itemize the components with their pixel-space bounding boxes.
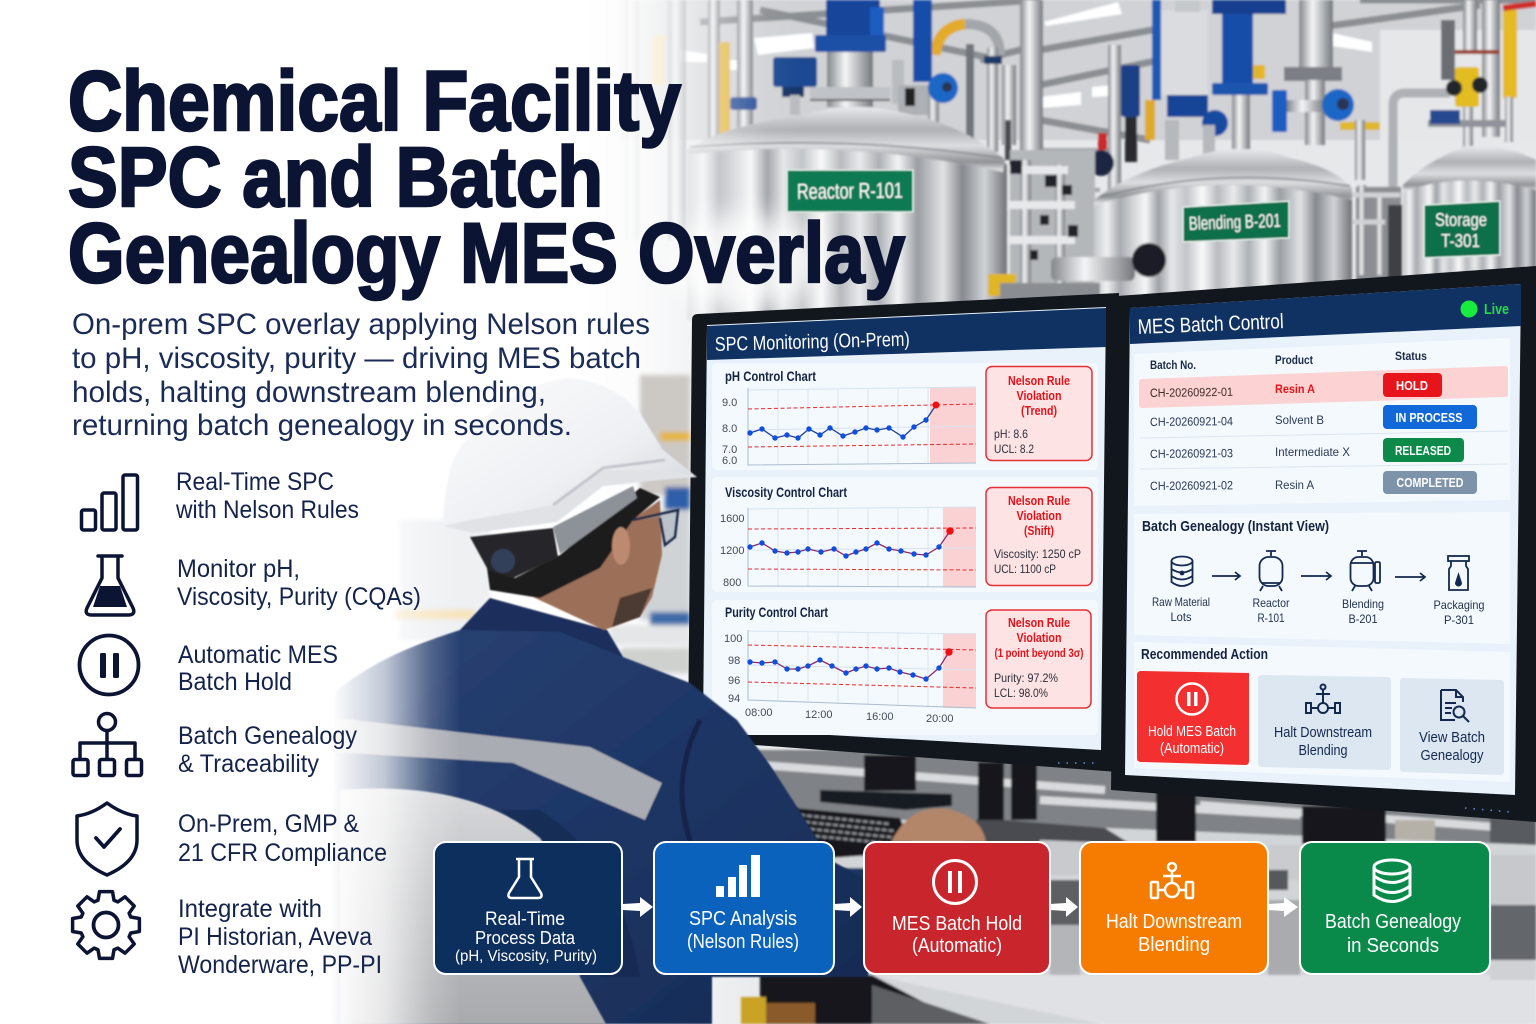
process flow: [434, 842, 1490, 974]
tanks: [687, 107, 1007, 320]
viscosity control chart panel: 1600: [720, 513, 744, 525]
status LEDs: [1058, 762, 1096, 764]
icon: pause: [80, 636, 138, 694]
equipment label: Reactor R-101: [787, 170, 913, 212]
status badge: in process: IN PROCESS: [1396, 410, 1463, 425]
purity control chart panel: [712, 600, 1098, 735]
status badge: in process: [1383, 405, 1477, 429]
screen background: [1125, 284, 1521, 795]
title: Genealogy MES Overlay: [68, 206, 905, 300]
batch status table: Resin A: [1275, 382, 1315, 396]
chair back: [340, 789, 606, 1024]
status badge: completed: [1383, 471, 1477, 494]
step 1: real-time process data: Real-Time: [485, 909, 565, 930]
purity control chart panel: 20:00: [926, 713, 954, 725]
desk and hardware below the monitors: [741, 750, 1536, 1024]
icon: bars: [82, 475, 138, 530]
subtitle: returning batch genealogy in seconds.: [72, 409, 572, 442]
purity control chart panel: 08:00: [745, 707, 773, 719]
pH control chart panel: 7.0: [722, 444, 737, 456]
lower dark area: [834, 868, 868, 978]
step 3: MES batch hold: (Automatic): [912, 935, 1002, 957]
purity violation alert: Nelson Rule: [1008, 615, 1070, 630]
recommended action panel: [1134, 642, 1510, 782]
viscosity control chart panel: [712, 477, 1098, 592]
subtitle: On-prem SPC overlay applying Nelson rules: [72, 308, 650, 341]
action button: halt downstream blending: [1258, 675, 1391, 770]
arrow: [623, 897, 653, 917]
purity control chart panel: 16:00: [866, 711, 894, 723]
status LEDs: [1465, 808, 1510, 812]
feature: monitor CQAs: Viscosity, Purity (CQAs): [177, 583, 421, 611]
equipment label: Blending B-201: Blending B-201: [1188, 211, 1281, 235]
icon: blending vessel: [1350, 551, 1380, 591]
left-of-tank cluster: [1010, 150, 1095, 300]
feature: automatic hold: [80, 636, 338, 696]
pH control chart panel: 9.0: [722, 397, 737, 409]
feature: integration: Wonderware, PP-PI: [178, 951, 382, 979]
action button: view batch genealogy: Genealogy: [1420, 747, 1484, 764]
purity control chart panel: 94: [728, 693, 740, 705]
equipment label: Reactor R-101: Reactor R-101: [797, 178, 903, 204]
viscosity violation alert: (Shift): [1024, 523, 1054, 538]
icon: raw material drum: [1172, 556, 1192, 586]
feature: real-time SPC: Real-Time SPC: [176, 468, 334, 496]
batch status table: CH-20260922-01: [1150, 385, 1233, 400]
pH control chart panel: 6.0: [722, 455, 737, 467]
purity control chart panel: 100: [724, 633, 742, 645]
arrow: [1301, 572, 1331, 580]
purity control chart panel: 12:00: [805, 709, 833, 721]
equipment label: Storage T-301: T-301: [1441, 231, 1480, 251]
icon: shield: [77, 803, 137, 875]
suspension strap: [470, 528, 558, 578]
action button: hold MES batch: Hold MES Batch: [1148, 723, 1236, 740]
batch status table: CH-20260921-02: [1150, 478, 1233, 493]
viscosity control chart panel: Viscosity Control Chart: [725, 484, 847, 500]
icon: reactor: [1260, 551, 1282, 591]
screen title: MES Batch Control: [1137, 310, 1284, 339]
step 1: real-time process data: Process Data: [475, 928, 576, 948]
batch genealogy panel: Reactor: [1252, 596, 1290, 610]
feature list: [73, 468, 421, 979]
batch status table: Status: [1395, 349, 1427, 363]
feature: integration: [73, 892, 382, 979]
blurred background behind worker: [395, 375, 690, 673]
step 4: halt downstream blending: [1080, 842, 1268, 974]
batch genealogy panel: [1134, 512, 1510, 644]
header bar: [707, 308, 1106, 360]
batch genealogy panel: Blending: [1342, 597, 1384, 611]
batch status table: Intermediate X: [1275, 445, 1350, 459]
purity violation alert: Violation: [1016, 630, 1062, 645]
status badge: released: RELEASED: [1395, 443, 1451, 458]
action button: halt downstream blending: Halt Downstream: [1274, 724, 1372, 741]
desk posts: [978, 762, 1004, 820]
hand: [891, 808, 986, 842]
icon: hierarchy: [73, 714, 142, 776]
action button: hold MES batch: (Automatic): [1160, 740, 1224, 757]
safety glasses: [633, 510, 678, 545]
step 1: real-time process data: [434, 842, 622, 974]
feature: automatic hold: Batch Hold: [178, 668, 292, 696]
recommended action panel: Recommended Action: [1141, 646, 1268, 663]
step 2: SPC analysis: [654, 842, 834, 974]
arrow: [1268, 897, 1298, 917]
step 5: batch genealogy in seconds: [1300, 842, 1490, 974]
middle stack: [1152, 0, 1161, 100]
viscosity violation alert: [986, 488, 1092, 586]
pH violation alert: (Trend): [1021, 403, 1057, 418]
batch status table: Batch No.: [1150, 358, 1196, 372]
batch status table: Resin A: [1275, 478, 1314, 492]
live indicator: [1460, 300, 1509, 318]
status badge: hold: [1383, 373, 1442, 397]
pH violation alert: Nelson Rule: [1008, 373, 1070, 388]
batch status table: [1134, 338, 1510, 506]
pH control chart panel: pH Control Chart: [725, 368, 816, 384]
step 5: batch genealogy in seconds: in Seconds: [1347, 935, 1439, 957]
viscosity violation alert: Nelson Rule: [1008, 493, 1070, 508]
title: SPC and Batch: [68, 130, 603, 224]
subtitle: [72, 308, 650, 442]
batch genealogy panel: Lots: [1170, 610, 1192, 624]
purity control chart panel: 98: [728, 655, 740, 667]
screen title: SPC Monitoring (On-Prem): [715, 329, 910, 356]
pH control chart panel: [712, 363, 1098, 470]
action button: halt downstream blending: Blending: [1298, 742, 1348, 759]
subtitle: to pH, viscosity, purity — driving MES batch: [72, 342, 641, 375]
batch genealogy panel: Packaging: [1434, 598, 1484, 612]
left monitor: SPC Monitoring: [688, 293, 1119, 772]
ear: [612, 527, 630, 565]
feature: genealogy: & Traceability: [178, 750, 319, 778]
soft white glow near title end: [670, 214, 820, 310]
shirt: [330, 600, 868, 1024]
fade: lower-left white wash over worker: [0, 500, 1536, 1024]
step 3: MES batch hold: [864, 842, 1050, 974]
batch genealogy panel: Batch Genealogy (Instant View): [1142, 518, 1329, 535]
pH violation alert: [986, 366, 1092, 460]
step 4: halt downstream blending: Halt Downstream: [1106, 911, 1242, 933]
step 5: batch genealogy in seconds: Batch Genealogy: [1325, 911, 1461, 933]
right monitor: MES Batch Control: [1111, 266, 1536, 822]
pH violation alert: UCL: 8.2: [994, 442, 1034, 456]
step 3: MES batch hold: MES Batch Hold: [892, 913, 1022, 935]
feature: integration: PI Historian, Aveva: [178, 923, 372, 951]
feature: compliance: [77, 803, 387, 875]
icon: packaging: [1448, 556, 1469, 590]
status badge: released: [1383, 438, 1464, 462]
feature: compliance: On-Prem, GMP &: [178, 810, 359, 838]
viscosity control chart panel: 800: [723, 577, 741, 589]
title: [68, 54, 905, 300]
action button: view batch genealogy: [1400, 678, 1504, 775]
collar: [460, 598, 623, 657]
subtitle: holds, halting downstream blending,: [72, 376, 546, 409]
action button: hold MES batch: [1137, 671, 1249, 765]
feature: genealogy: [73, 714, 357, 778]
header bar: [1130, 284, 1521, 344]
vertical columns: [625, 0, 639, 240]
batch genealogy panel: B-201: [1348, 612, 1378, 626]
worker in hard hat: [330, 378, 868, 1024]
step 2: SPC analysis: (Nelson Rules): [687, 931, 799, 953]
feature: monitor CQAs: [86, 555, 421, 615]
pH control chart panel: 8.0: [722, 423, 737, 435]
equipment label: Storage T-301: [1424, 201, 1500, 258]
viscosity violation alert: Viscosity: 1250 cP: [994, 547, 1081, 561]
pH violation alert: pH: 8.6: [994, 427, 1028, 441]
arrow: [1212, 572, 1240, 580]
live indicator: Live: [1484, 301, 1509, 318]
feature: automatic hold: Automatic MES: [178, 641, 338, 669]
icon: flask: [86, 556, 134, 615]
purity violation alert: LCL: 98.0%: [994, 686, 1048, 700]
batch genealogy panel: Raw Material: [1152, 595, 1210, 609]
arrow: [834, 897, 862, 917]
beard: [612, 588, 652, 627]
batch status table: CH-20260921-03: [1150, 446, 1233, 461]
icon: gear: [73, 892, 139, 958]
feature: real-time SPC: [82, 468, 359, 530]
viscosity violation alert: UCL: 1100 cP: [994, 562, 1056, 576]
arrow: [1050, 897, 1078, 917]
screen background: [703, 307, 1106, 750]
step 1: real-time process data: (pH, Viscosity, Purity): [455, 948, 597, 965]
reactor stack: [935, 24, 965, 55]
pipes between tanks: [1356, 187, 1401, 287]
action button: view batch genealogy: View Batch: [1419, 729, 1485, 746]
stand and keyboard: [864, 755, 916, 791]
equipment label: Blending B-201: [1183, 201, 1289, 242]
step 2: SPC analysis: SPC Analysis: [689, 908, 797, 930]
feature: genealogy: Batch Genealogy: [178, 722, 357, 750]
batch genealogy panel: R-101: [1258, 611, 1285, 625]
hard hat: [443, 378, 697, 533]
viscosity violation alert: Violation: [1016, 508, 1062, 523]
status badge: hold: HOLD: [1396, 378, 1428, 393]
feature: compliance: 21 CFR Compliance: [178, 839, 387, 867]
purity violation alert: Purity: 97.2%: [994, 671, 1058, 685]
purity control chart panel: Purity Control Chart: [725, 604, 828, 620]
ceiling: [620, 0, 1536, 140]
feature: real-time SPC: with Nelson Rules: [175, 496, 359, 524]
purity violation alert: [986, 610, 1091, 708]
purity control chart panel: 96: [728, 675, 740, 687]
feature: integration: Integrate with: [178, 895, 322, 923]
batch status table: Solvent B: [1275, 413, 1324, 427]
ceiling lights: [680, 2, 1372, 108]
purity violation alert: (1 point beyond 3σ): [994, 646, 1084, 660]
step 4: halt downstream blending: Blending: [1138, 934, 1210, 956]
pH violation alert: Violation: [1016, 388, 1062, 403]
status badge: completed: COMPLETED: [1396, 475, 1464, 490]
feature: monitor CQAs: Monitor pH,: [177, 555, 300, 583]
arrow: [1395, 573, 1425, 581]
reflective stripe: [335, 718, 662, 820]
batch status table: CH-20260921-04: [1150, 414, 1233, 429]
neck and face: [533, 500, 662, 630]
title: Chemical Facility: [68, 54, 681, 148]
batch status table: Product: [1275, 353, 1313, 367]
right stack: [1393, 93, 1450, 200]
sleeve seam: [682, 720, 720, 975]
equipment label: Storage T-301: Storage: [1435, 210, 1487, 230]
hair: [487, 488, 660, 598]
batch genealogy panel: P-301: [1444, 613, 1474, 627]
viscosity control chart panel: 1200: [720, 545, 744, 557]
